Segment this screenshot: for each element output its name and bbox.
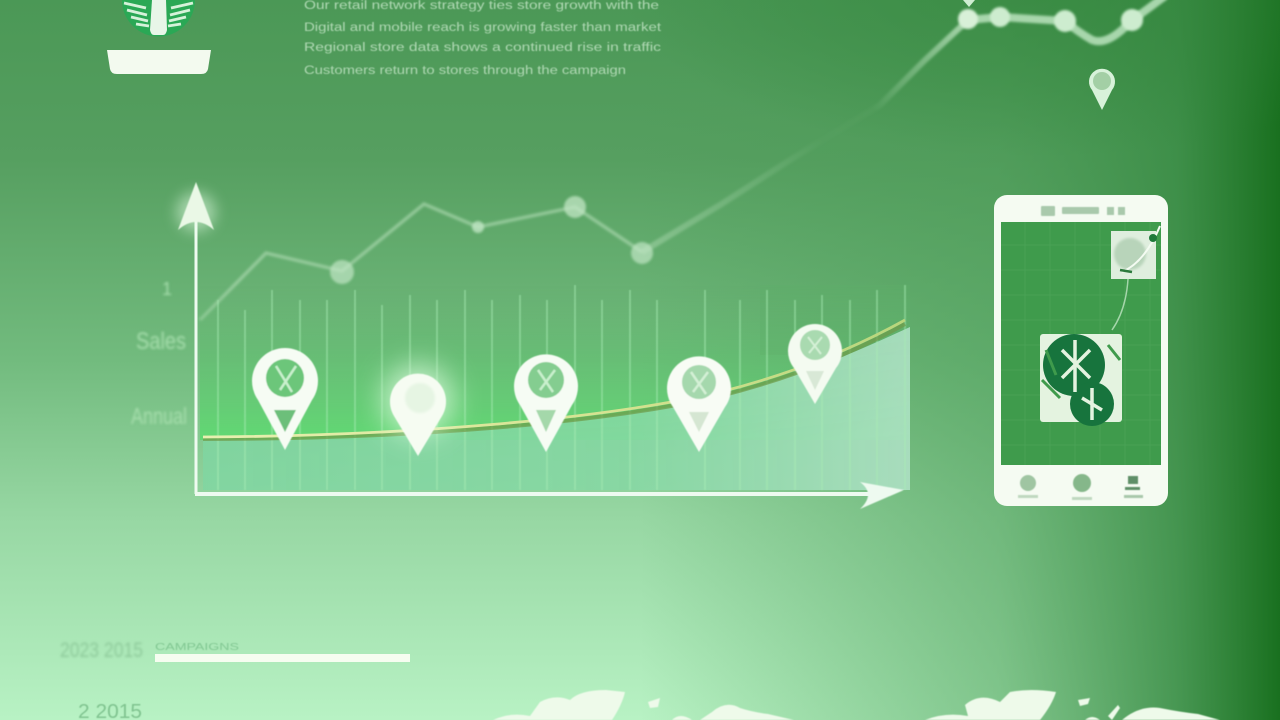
axis labels: Sales — [136, 328, 186, 355]
vertical grid lines — [218, 285, 905, 490]
axis labels: 1 — [162, 279, 172, 299]
icon: map pin top right — [1089, 69, 1115, 110]
metric label: 2023 2015 — [60, 639, 143, 662]
trend line fading middle — [642, 20, 968, 252]
intro text block: Our retail network strategy ties store growth with the — [304, 0, 659, 12]
screen faint grid — [1001, 222, 1161, 465]
axis labels — [131, 279, 187, 429]
bottom left metric rows — [60, 639, 410, 720]
bar caption: CAMPAIGNS — [155, 641, 239, 653]
y axis with arrow — [176, 182, 216, 494]
phone status bar — [1041, 206, 1125, 216]
x axis with arrow — [195, 482, 904, 509]
growth curve — [203, 320, 905, 437]
chart glow field — [200, 285, 910, 440]
area chart — [131, 182, 910, 509]
phone body — [994, 195, 1168, 506]
pin 2 glowing — [382, 364, 454, 456]
intro text block: Digital and mobile reach is growing faster than market — [304, 22, 662, 34]
phone screen — [1001, 222, 1161, 465]
trend markers — [330, 7, 1143, 284]
intro text block: Customers return to stores through the campaign — [304, 65, 626, 77]
icon: small map pin at top edge — [963, 0, 975, 7]
screen emblem card — [1040, 334, 1122, 426]
logo: round emblem on a white base — [107, 0, 211, 74]
growth curve shadow — [203, 324, 905, 439]
trend line top — [968, 0, 1165, 41]
pin 4 — [667, 356, 731, 452]
intro text block: Regional store data shows a continued rise in traffic — [304, 42, 661, 54]
icon: white base — [107, 50, 211, 74]
world map silhouette left — [493, 690, 794, 720]
screen thumbnail card — [1111, 226, 1160, 279]
line chart extending to top right — [200, 0, 1165, 320]
pin 5 — [788, 324, 842, 404]
world map silhouette right — [925, 690, 1220, 720]
phone mockup — [994, 195, 1168, 506]
pin 3 — [514, 354, 578, 452]
metric bar — [155, 654, 410, 662]
background above curve on right side — [760, 285, 910, 355]
icon: round green emblem — [122, 0, 195, 36]
area under curve — [203, 327, 910, 490]
intro text block — [304, 0, 662, 77]
connector line — [1112, 279, 1128, 330]
axis labels: Annual — [131, 403, 187, 429]
pin 1 — [252, 348, 318, 450]
phone navigation icons — [1018, 474, 1143, 500]
trend line left — [200, 204, 642, 320]
